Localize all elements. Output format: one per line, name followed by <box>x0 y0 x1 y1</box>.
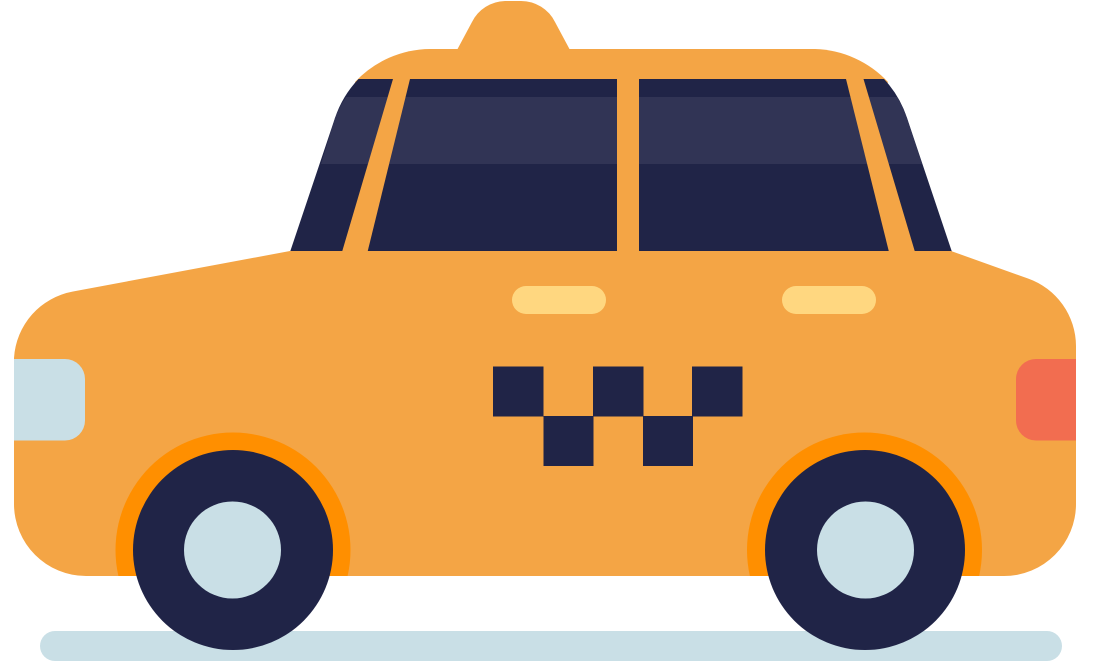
door handle: rear <box>782 286 876 314</box>
left wheel arch <box>116 433 350 576</box>
window glare band <box>321 97 922 164</box>
door handle: front <box>512 286 606 314</box>
window dark backing <box>290 79 952 252</box>
left wheel <box>133 450 333 650</box>
car roof <box>355 49 888 100</box>
taxi roof sign <box>457 1 570 50</box>
headlight <box>14 359 85 440</box>
car body <box>14 251 1076 576</box>
right wheel arch <box>747 433 982 576</box>
window pillars <box>342 79 915 252</box>
checker pattern <box>493 366 742 466</box>
right wheel <box>765 450 965 650</box>
tail light <box>1016 359 1076 440</box>
ground shadow bar <box>40 631 1062 661</box>
